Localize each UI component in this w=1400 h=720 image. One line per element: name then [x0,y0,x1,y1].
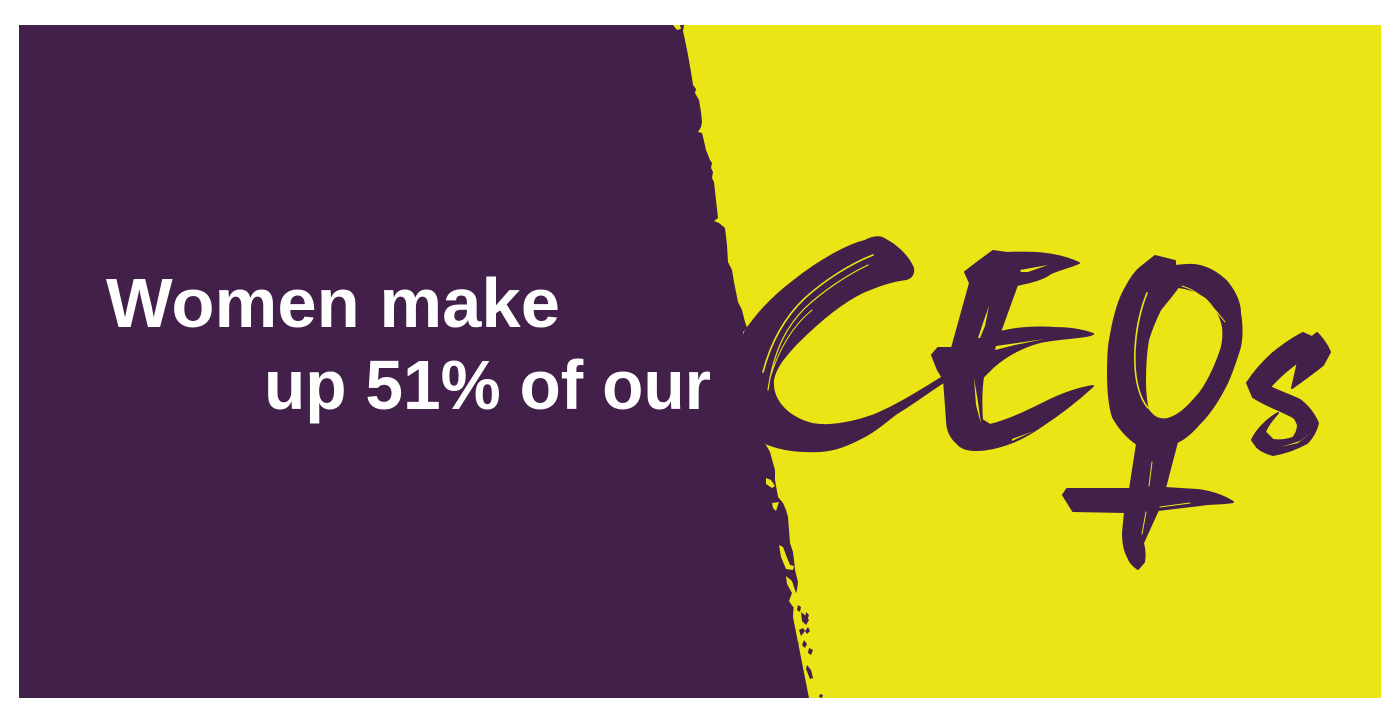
heading line 2: up 51% of our [264,346,711,424]
brush lettering: CEOs with female symbol [745,237,1330,569]
letter s [1247,333,1330,455]
E dry-brush streaks [974,265,1048,441]
O dry-brush streaks [1135,286,1225,534]
letter E [932,251,1093,450]
panel: purple torn-edge area [19,25,809,698]
letter O as female symbol [1063,256,1242,569]
heading: Women make up 51% of our [106,264,711,424]
torn edge flecks [743,327,823,698]
letter C [745,237,945,451]
s dry-brush streak [1281,432,1312,447]
C dry-brush streaks [763,255,873,390]
heading line 1: Women make [106,264,560,342]
